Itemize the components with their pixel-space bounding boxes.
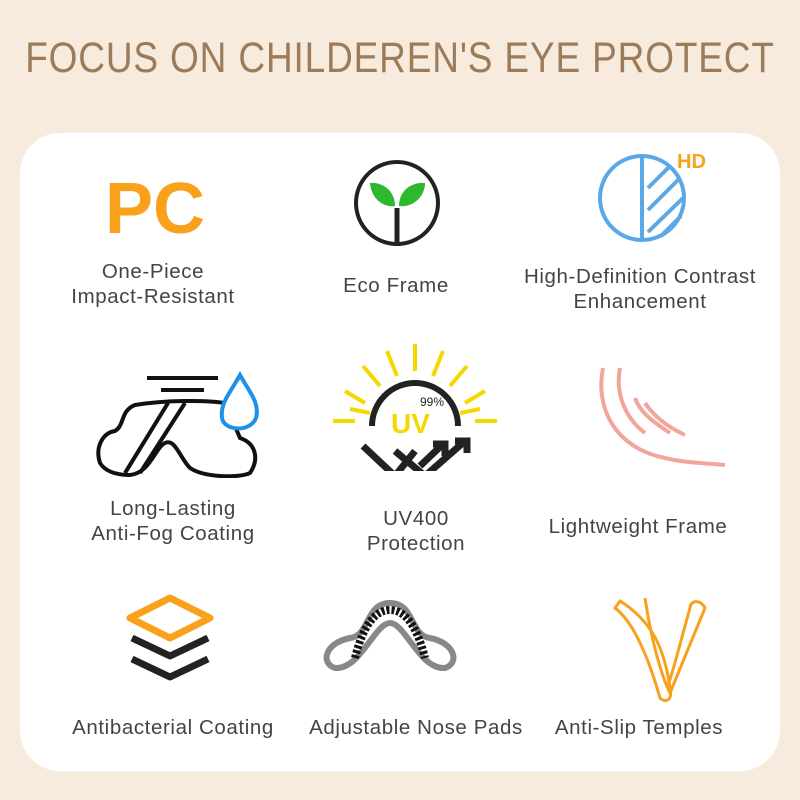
label: PC: Impact-Resistant — [71, 285, 235, 308]
icon: layers — [126, 594, 214, 680]
icon: temples — [613, 598, 707, 702]
label: anti-fog: Anti-Fog Coating — [91, 522, 255, 545]
icon: UV: UV — [391, 408, 430, 439]
label: anti-fog: Long-Lasting — [110, 497, 236, 520]
label: UV: UV400 — [383, 507, 449, 530]
icon: anti-fog — [96, 371, 259, 478]
label: temples: Anti-Slip Temples — [555, 716, 723, 739]
label: HD — [524, 265, 756, 313]
label: PC — [71, 260, 235, 308]
label: UV: Protection — [367, 532, 465, 555]
icon: nose pads — [324, 600, 456, 671]
label: lightweight: Lightweight Frame — [549, 515, 727, 538]
panel: features card — [20, 133, 780, 771]
label: PC: One-Piece — [102, 260, 204, 283]
icon: eco — [354, 160, 440, 246]
label: UV — [367, 507, 465, 555]
icon: lightweight feather — [599, 368, 726, 467]
icon: HD — [598, 151, 706, 242]
label: antibacterial: Antibacterial Coating — [72, 716, 274, 739]
label: HD: Enhancement — [573, 290, 707, 313]
label: anti-fog — [91, 497, 255, 545]
label: nose pads: Adjustable Nose Pads — [309, 716, 523, 739]
label: eco: Eco Frame — [343, 274, 449, 297]
icon: UV: 99% — [420, 395, 444, 409]
label: HD: High-Definition Contrast — [524, 265, 756, 288]
icon: UV — [333, 344, 497, 471]
title: FOCUS ON CHILDEREN'S EYE PROTECT — [25, 34, 775, 82]
icon: HD: HD — [677, 151, 706, 173]
